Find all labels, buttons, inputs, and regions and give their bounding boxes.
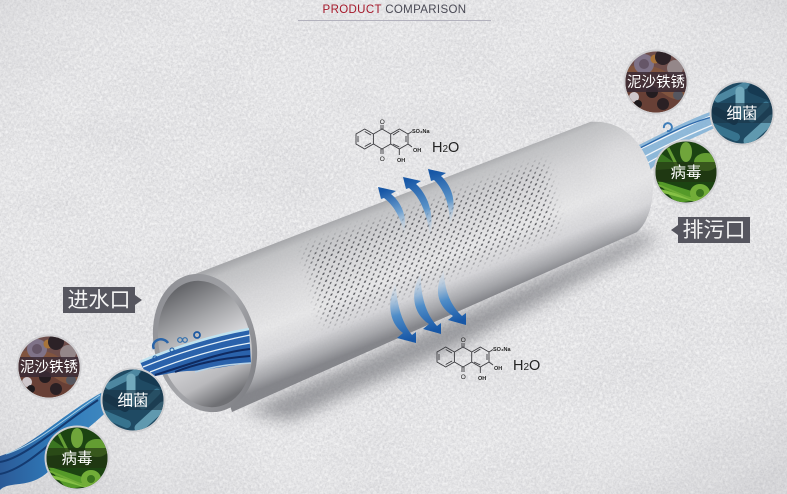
pipe interior xyxy=(146,271,264,417)
H2O top: H2O xyxy=(432,140,459,156)
arrows down xyxy=(390,270,466,343)
badge: virus, outlet: 病毒 xyxy=(670,164,702,182)
arrows up xyxy=(378,169,454,236)
badge: virus, inlet: 病毒 xyxy=(61,450,93,468)
perforated area xyxy=(299,158,564,330)
H2O bottom: H2O xyxy=(513,358,540,374)
arrow up 1 xyxy=(378,187,405,234)
outlet label: 排污口 xyxy=(682,219,746,242)
molecule bottom xyxy=(437,337,511,382)
pipe end highlight xyxy=(598,140,646,220)
molecule top: OH xyxy=(413,148,421,154)
badge: bacteria, inlet: 细菌 xyxy=(117,392,149,410)
inlet label: 进水口 xyxy=(68,289,130,312)
arrow up 3 xyxy=(428,169,454,226)
badge: sediment and rust, inlet: 泥沙铁锈 xyxy=(20,359,78,376)
badge: bacteria, inlet xyxy=(100,368,166,432)
molecule top: O xyxy=(380,119,385,126)
molecule bottom: O xyxy=(461,337,466,344)
arrow down 3 xyxy=(438,270,466,325)
badge: virus, inlet xyxy=(44,426,110,490)
pipe body xyxy=(190,122,653,412)
water stream inlet xyxy=(0,329,251,490)
stream into pipe xyxy=(140,329,251,376)
badge: sediment and rust, inlet xyxy=(16,334,82,400)
badge: sediment and rust, outlet: 泥沙铁锈 xyxy=(627,74,685,91)
arrow down 2 xyxy=(414,273,441,334)
molecule bottom: OH xyxy=(478,376,486,382)
stream lower left xyxy=(0,392,110,490)
pipe surface grain xyxy=(257,176,642,342)
molecule bottom: OH xyxy=(494,366,502,372)
arrow up 2 xyxy=(403,177,432,236)
badge: sediment and rust, outlet xyxy=(624,49,688,114)
molecule top: OH xyxy=(397,158,405,164)
badge: bacteria, outlet: 细菌 xyxy=(726,104,758,122)
pipe rim xyxy=(140,263,270,423)
water stream outlet behind pipe xyxy=(637,108,726,170)
arrow down 1 xyxy=(390,283,416,343)
molecule top xyxy=(356,119,430,164)
pipe xyxy=(152,122,653,412)
molecule bottom: SO₃Na xyxy=(493,347,511,353)
badge: virus, outlet xyxy=(654,140,718,204)
pipe shadow xyxy=(245,234,660,420)
badge: bacteria, outlet xyxy=(710,80,774,146)
molecule top: SO₃Na xyxy=(412,129,430,135)
title: PRODUCT COMPARISON xyxy=(323,4,466,16)
molecule bottom: O xyxy=(461,374,466,381)
molecule top: O xyxy=(380,156,385,163)
